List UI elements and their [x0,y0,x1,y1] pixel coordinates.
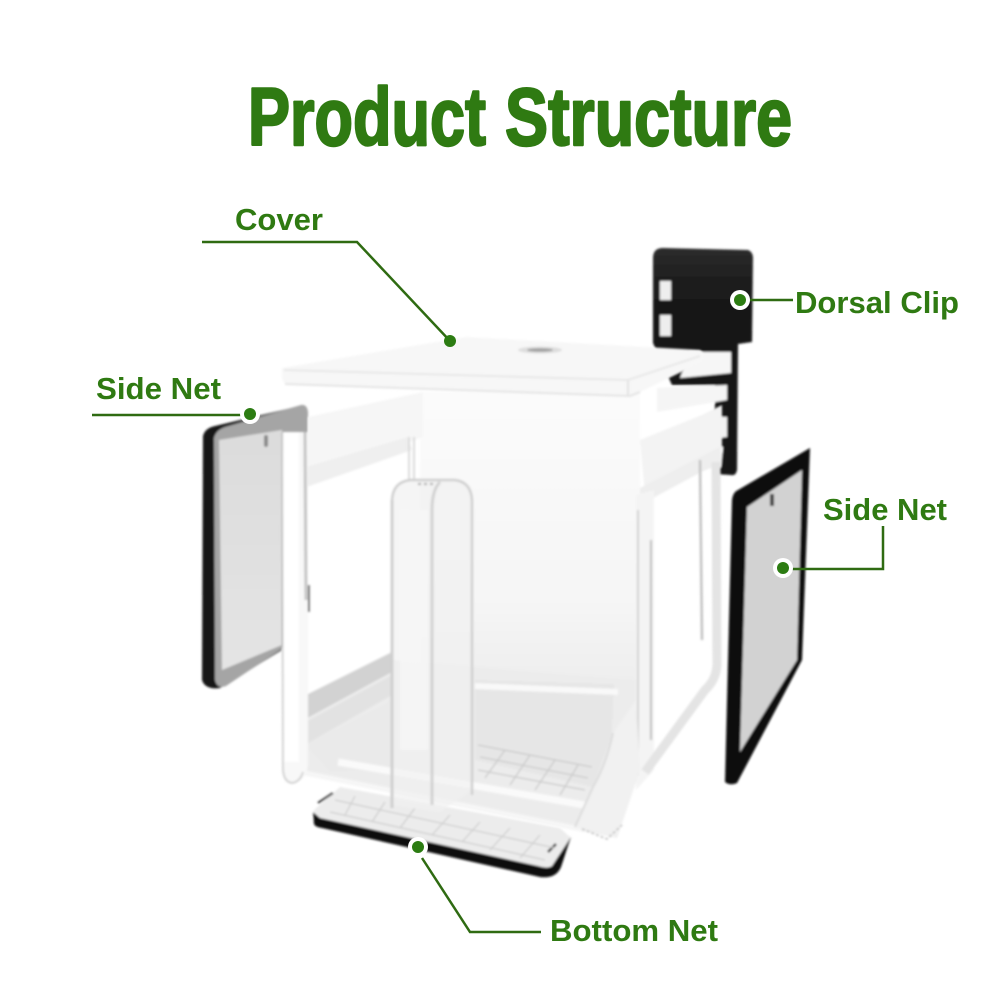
panel: transparent box [282,392,722,839]
centre rail [392,480,472,812]
left floor band [300,652,392,722]
callout: Bottom Net [408,837,718,948]
callout: right Side Net [773,492,947,578]
callout: Cover [202,202,456,347]
floor highlights [475,686,618,692]
title: Structure [505,72,792,163]
left front post [283,432,308,783]
title [248,72,792,163]
callout: left Side Net: Side Net [96,371,221,406]
panel: cover [282,337,704,396]
callout: Dorsal Clip: Dorsal Clip [795,285,959,320]
panel: right side net [725,448,810,784]
grid through floor [478,745,592,795]
panel: bottom net [313,787,571,877]
panel: left side net [202,405,309,688]
floor wash [300,660,640,838]
left window [300,450,408,700]
callout: left Side Net [92,371,260,424]
title: Product [248,72,486,163]
callout: Cover: Cover [235,202,323,237]
callout: right Side Net: Side Net [823,492,947,527]
icon: dorsal clip [653,248,753,475]
back wall [420,392,640,760]
right posts [636,490,654,790]
callout: Bottom Net: Bottom Net [550,913,718,948]
right wall window [653,473,695,730]
left slide rail [409,437,414,480]
